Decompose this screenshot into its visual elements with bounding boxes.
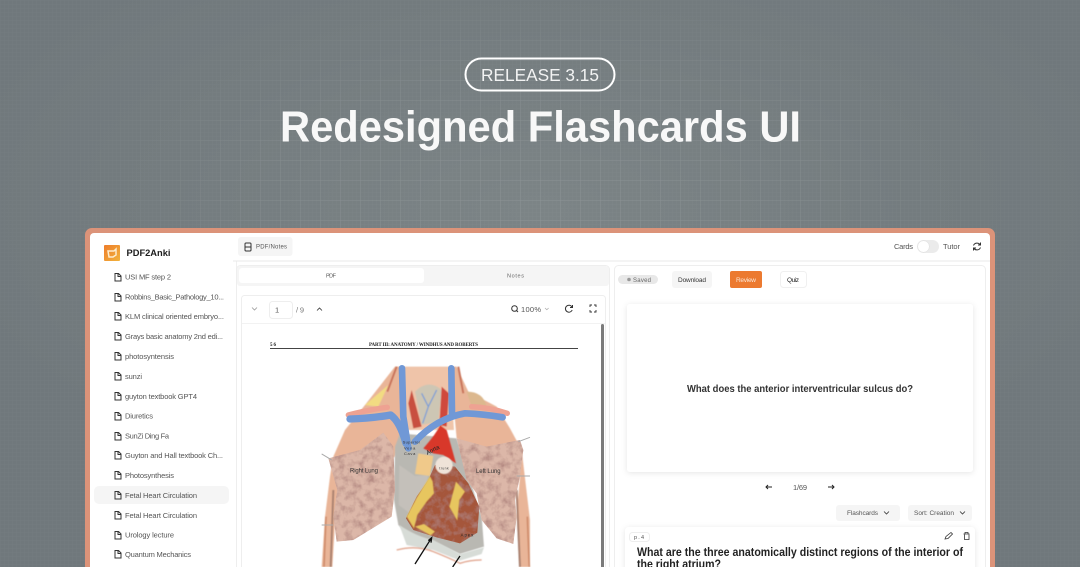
tab bar: Notes — [507, 274, 524, 280]
heart — [406, 465, 479, 543]
document list: Diuretics — [125, 412, 153, 420]
mediastinum backing — [394, 433, 484, 554]
trachea and neck vessels — [403, 367, 456, 463]
app logo — [104, 245, 120, 261]
right atrium — [399, 465, 428, 513]
document list — [115, 272, 224, 559]
question card: What does the anterior interventricular sulcus do? — [687, 383, 913, 395]
flashcard preview: p.4 — [634, 535, 644, 541]
figure labels: Right Lung — [350, 468, 378, 474]
figure labels: Vena — [404, 445, 416, 450]
page controls — [252, 302, 322, 318]
mode toggle: Cards — [894, 242, 913, 251]
figure labels: Left Lung — [476, 469, 501, 475]
document list: photosyntensis — [125, 352, 174, 361]
left lung — [457, 438, 523, 544]
zoom controls — [512, 305, 596, 314]
page controls: 1 — [275, 306, 279, 314]
toolbar: Saved — [633, 278, 651, 284]
app name: PDF2Anki — [126, 248, 170, 259]
card pager: 1/69 — [793, 483, 807, 492]
flashcard preview — [625, 527, 975, 567]
viewer card — [242, 296, 606, 567]
flashcard preview: What are the three anatomically distinct regions of the interior of — [637, 547, 963, 559]
page controls: / 9 — [296, 306, 304, 314]
release badge — [466, 58, 614, 90]
zoom controls: 100% — [521, 305, 541, 314]
PDF/Notes button — [238, 237, 292, 256]
selected item highlight — [94, 486, 229, 504]
panel: PDF viewer — [236, 266, 610, 567]
blue veins — [348, 368, 507, 448]
anatomy illustration — [322, 367, 530, 567]
figure labels — [350, 440, 501, 538]
document list: Grays basic anatomy 2nd edi... — [125, 332, 223, 341]
diaphragm — [397, 525, 484, 563]
document list: Fetal Heart Circulation — [125, 511, 197, 520]
pulmonary trunk — [435, 457, 453, 474]
release badge: RELEASE 3.15 — [481, 65, 599, 85]
toolbar: Review — [736, 277, 756, 284]
toolbar: Download — [678, 277, 706, 284]
toolbar — [618, 271, 806, 288]
figure labels: Aorta — [425, 444, 441, 457]
app window — [85, 228, 995, 567]
pointer arrows — [415, 538, 460, 567]
document list: Photosynthesis — [125, 471, 174, 480]
document list: Quantum Mechanics — [125, 550, 191, 559]
panel: flashcards — [614, 266, 986, 567]
document list: guyton textbook GPT4 — [125, 392, 197, 401]
card pager — [766, 483, 834, 492]
figure labels: Apex — [461, 533, 474, 538]
mode toggle — [894, 240, 980, 253]
tab bar — [237, 266, 609, 286]
scrollbar — [601, 324, 604, 567]
page header: PART III: ANATOMY / WINDHUS AND ROBERTS — [369, 343, 478, 348]
ascending aorta — [415, 453, 433, 476]
chest wall — [322, 367, 530, 567]
sidebar — [94, 245, 229, 559]
document list: Fetal Heart Circulation — [125, 491, 197, 500]
tab bar: PDF — [326, 274, 337, 280]
document list: Robbins_Basic_Pathology_10... — [125, 292, 224, 302]
document list: Guyton and Hall textbook Ch... — [125, 451, 223, 460]
PDF/Notes button: PDF/Notes — [256, 244, 287, 250]
document list: SunZi Ding Fa — [125, 432, 170, 440]
document list: USI MF step 2 — [125, 272, 171, 282]
document list: sunzi — [125, 372, 142, 381]
right lung — [328, 433, 395, 542]
filter dropdowns — [836, 505, 972, 521]
document list: Urology lecture — [125, 530, 174, 540]
toolbar: Quiz — [787, 277, 799, 284]
question card — [627, 304, 973, 472]
retractor pins — [322, 437, 530, 525]
mode toggle: Tutor — [943, 242, 960, 251]
figure labels: trunk — [439, 466, 449, 470]
document list: KLM clinical oriented embryo... — [125, 312, 224, 321]
figure labels: Cava — [404, 451, 416, 456]
figure labels: Superior — [403, 440, 421, 445]
coronary fat — [407, 476, 465, 535]
filter dropdowns: Sort: Creation — [914, 510, 954, 517]
page header — [270, 343, 578, 349]
filter dropdowns: Flashcards — [847, 510, 879, 517]
title: Redesigned Flashcards UI — [280, 102, 801, 152]
page header: 56 — [270, 343, 276, 348]
